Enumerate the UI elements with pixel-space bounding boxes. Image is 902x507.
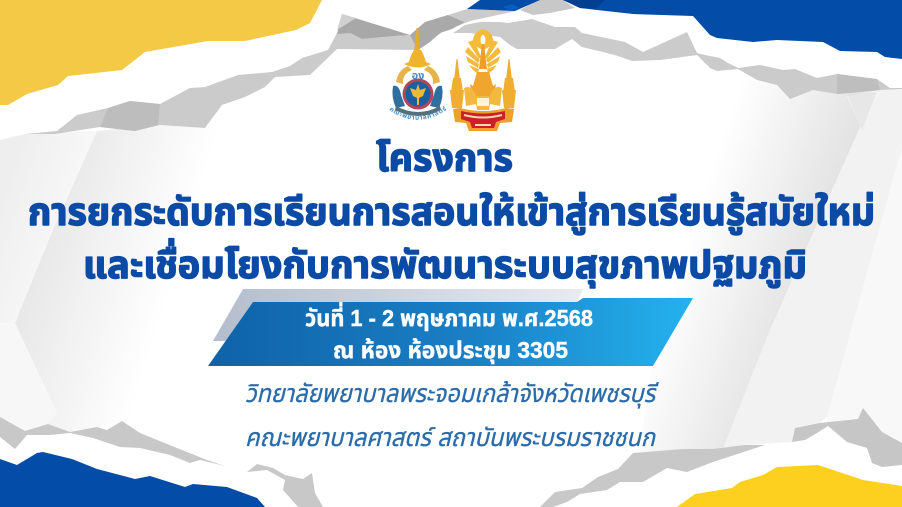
institute name: คณะพยาบาลศาสตร์ สถาบันพระบรมราชชนก — [245, 424, 656, 452]
heading: project title — [28, 138, 875, 288]
heading line 1: โครงการ — [376, 138, 513, 180]
college name: วิทยาลัยพยาบาลพระจอมเกล้าจังหวัดเพชรบุรี — [245, 380, 659, 409]
date banner — [208, 289, 693, 366]
heading line 2: การยกระดับการเรียนการสอนให้เข้าสู่การเรียนรู้สมัยใหม่ — [28, 192, 875, 235]
organisation text — [245, 380, 659, 452]
panel: blue corner top right — [467, 0, 902, 59]
panel: yellow corner top left — [0, 0, 322, 105]
panel: torn paper shadow bottom left — [0, 417, 323, 507]
emblem: Praboromarajchanok logo — [450, 29, 516, 131]
panel: torn paper shadow top left — [25, 9, 515, 134]
emblem: nursing faculty logo — [389, 28, 446, 120]
panel: torn paper shadow bottom right — [540, 408, 902, 507]
panel: torn paper shadow top right — [453, 0, 902, 99]
room text: ณ ห้อง ห้องประชุม 3305 — [333, 337, 568, 364]
panel: blue corner bottom left — [0, 452, 265, 507]
emblem: nursing faculty logo: อง — [412, 70, 424, 82]
panel: yellow corner bottom right — [677, 465, 902, 507]
heading line 3: และเชื่อมโยงกับการพัฒนาระบบสุขภาพปฐมภูมิ — [83, 238, 807, 288]
emblem: nursing faculty logo: คณะพยาบาลศาสตร์ — [389, 106, 446, 120]
date text: วันที่ 1 - 2 พฤษภาคม พ.ศ.2568 — [305, 302, 593, 331]
